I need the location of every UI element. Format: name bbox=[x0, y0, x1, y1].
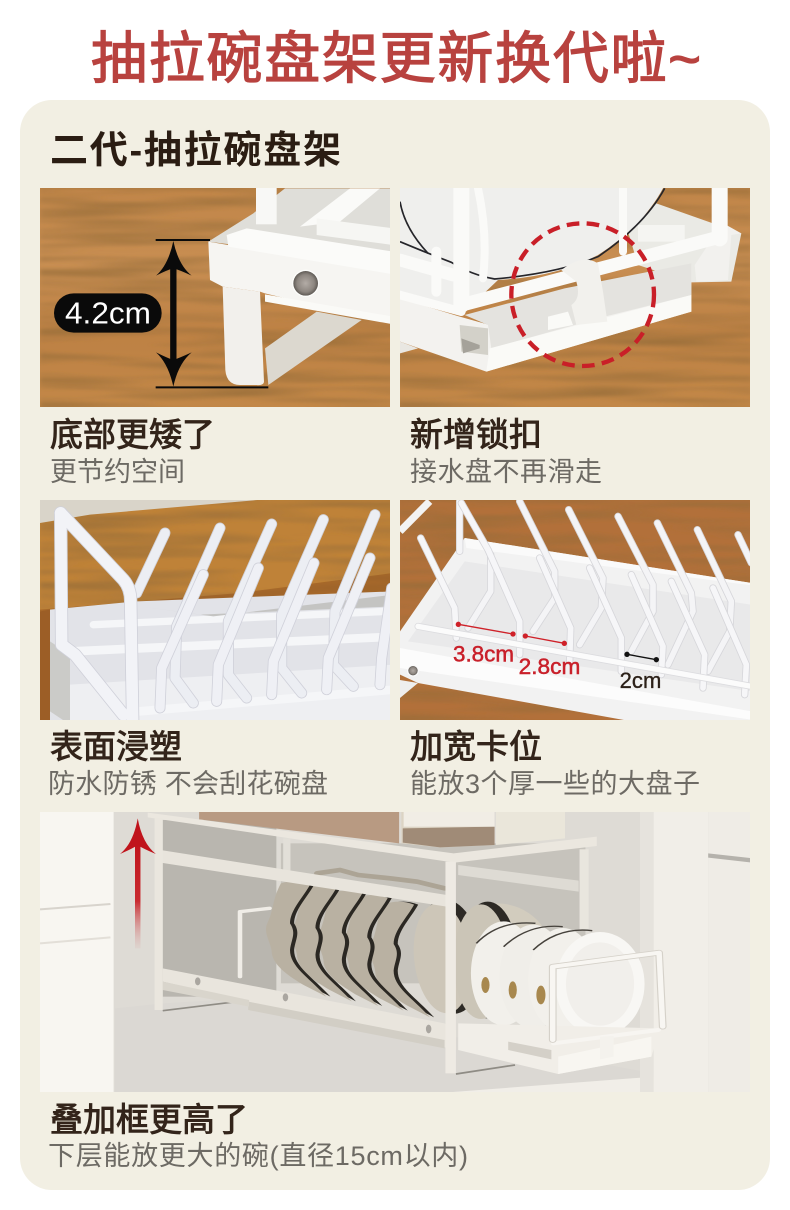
red dashed circle highlight bbox=[511, 223, 654, 366]
caption: new lock clip bbox=[410, 416, 602, 487]
photo: dip-coated surface bbox=[40, 498, 393, 725]
right cabinet bbox=[640, 810, 753, 1093]
caption: widened slots bbox=[410, 728, 700, 799]
label: 4.2cm bbox=[54, 293, 162, 333]
photo: new lock clip bbox=[398, 185, 751, 412]
stacked wavy plates bbox=[266, 870, 554, 1019]
measure: 2.8cm bbox=[520, 633, 580, 674]
measure: 2.8cm: 2.8cm bbox=[519, 654, 580, 679]
caption: lower base bbox=[50, 416, 215, 487]
photo: taller stacking frame with bowls bbox=[40, 810, 753, 1093]
caption: taller stacking frame: 下层能放更大的碗(直径15cm以内) bbox=[48, 1141, 468, 1171]
left cabinet bbox=[40, 810, 114, 1093]
caption: dip-coated surface bbox=[48, 728, 328, 799]
label: 4.2cm: 4.2cm bbox=[65, 296, 151, 330]
caption: dip-coated surface: 防水防锈 不会刮花碗盘 bbox=[48, 769, 328, 799]
measure: 3.8cm bbox=[453, 622, 516, 666]
title: 抽拉碗盘架更新换代啦~ bbox=[91, 27, 701, 90]
caption: taller stacking frame: 叠加框更高了 bbox=[50, 1101, 248, 1138]
caption: lower base: 底部更矮了 bbox=[50, 416, 215, 453]
white bowls bbox=[471, 921, 645, 1036]
caption: widened slots: 能放3个厚一些的大盘子 bbox=[410, 769, 700, 799]
caption: widened slots: 加宽卡位 bbox=[410, 728, 542, 765]
caption: new lock clip: 新增锁扣 bbox=[410, 416, 542, 453]
measure: 2cm bbox=[620, 652, 660, 688]
caption: lower base: 更节约空间 bbox=[50, 457, 185, 487]
caption: taller stacking frame bbox=[48, 1101, 468, 1171]
wire frame back stop bbox=[240, 908, 270, 977]
caption: dip-coated surface: 表面浸塑 bbox=[50, 728, 182, 765]
red upward arrow bbox=[120, 818, 156, 948]
measure: 3.8cm: 3.8cm bbox=[453, 641, 514, 666]
caption: new lock clip: 接水盘不再滑走 bbox=[410, 457, 602, 487]
pull-out tray bbox=[458, 1023, 660, 1074]
photo: widened slots with sizes bbox=[398, 498, 751, 725]
slide rail bbox=[163, 968, 456, 1050]
top shelf bbox=[148, 813, 597, 1073]
photo: rack foot height 4.2cm bbox=[40, 185, 393, 412]
heading: 二代-抽拉碗盘架 bbox=[50, 130, 341, 172]
measure: 2cm: 2cm bbox=[620, 668, 661, 693]
